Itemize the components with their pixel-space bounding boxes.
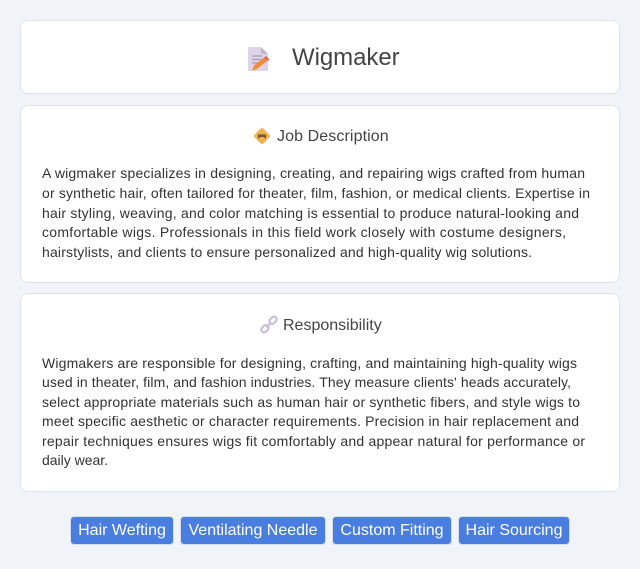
- text block: job description: [42, 165, 590, 260]
- text block: responsibility: [42, 355, 585, 468]
- heading: Wigmaker: Wigmaker: [292, 44, 400, 71]
- text block: job description: comfortable wigs. Professionals in this field work closely with costume designers,: [42, 224, 566, 240]
- text block: responsibility: meet specific aesthetic or character requirements. Precision in hair replacement and: [42, 413, 579, 429]
- text block: job description: A wigmaker specializes in designing, creating, and repairing wigs crafted from human: [42, 165, 585, 181]
- tag: Custom Fitting: [332, 516, 452, 545]
- text block: job description: hairstylists, and clients to ensure personalized and high-quality wig solutions.: [42, 244, 532, 260]
- heading: responsibility: Responsibility: [283, 317, 382, 334]
- text block: responsibility: used in theater, film, and fashion industries. They measure clients' heads accurately,: [42, 374, 571, 390]
- tag: Ventilating Needle: Ventilating Needle: [188, 522, 317, 539]
- text block: responsibility: repair techniques ensures wigs fit comfortably and appear natural for performance or: [42, 433, 585, 449]
- icon: document with pencil: [248, 47, 270, 71]
- text block: responsibility: select appropriate materials such as human hair or synthetic fibers, and style wigs to: [42, 394, 580, 410]
- icon: diamond badge: [254, 128, 270, 144]
- text block: responsibility: Wigmakers are responsible for designing, crafting, and maintaining high-quality wigs: [42, 355, 577, 371]
- tag: Hair Sourcing: [458, 516, 570, 545]
- tag: Hair Wefting: [70, 516, 174, 545]
- tag: Custom Fitting: Custom Fitting: [340, 522, 444, 539]
- panel: title: [20, 20, 620, 94]
- text block: responsibility: daily wear.: [42, 452, 108, 468]
- text block: job description: hair styling, weaving, and color matching is essential to produce natural-looking and: [42, 205, 579, 221]
- text block: job description: or synthetic hair, often tailored for theater, film, fashion, or medical clients. Expertise in: [42, 185, 590, 201]
- tag: Hair Sourcing: Hair Sourcing: [466, 522, 562, 539]
- panel: job description: [20, 105, 620, 283]
- tag: Hair Wefting: Hair Wefting: [78, 522, 166, 539]
- panel: responsibility: [20, 293, 620, 492]
- heading: job description: Job Description: [277, 128, 389, 145]
- icon: chain link: [260, 316, 278, 334]
- tag: Ventilating Needle: [180, 516, 326, 545]
